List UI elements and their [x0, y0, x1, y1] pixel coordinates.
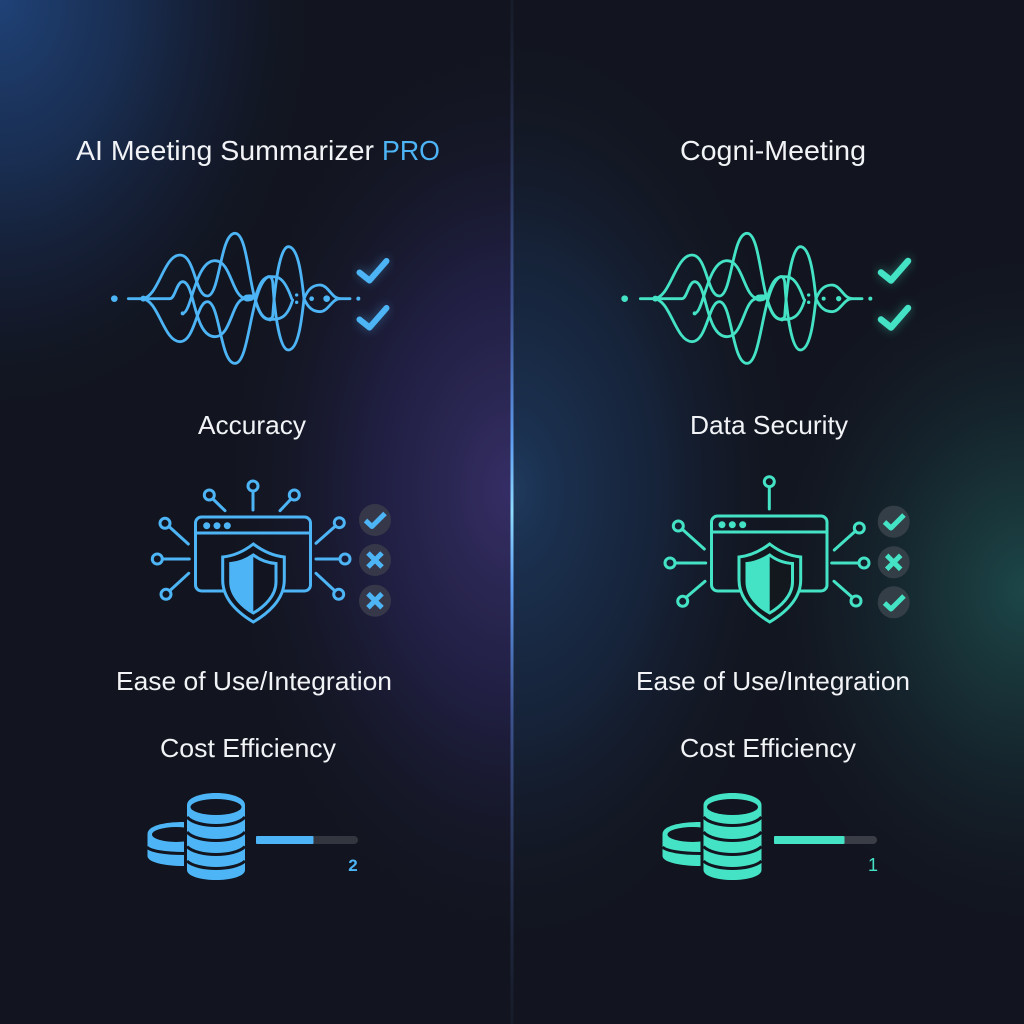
status: check, cross, cross — [359, 504, 391, 617]
icon: blue waveform — [111, 233, 360, 363]
icon: green check marks — [881, 261, 908, 328]
panel: AI Meeting Summarizer PRO — [76, 135, 440, 880]
label: Accuracy: Accuracy — [198, 410, 306, 440]
progress bar: score 1 — [774, 836, 877, 844]
icon: blue coin stacks — [147, 793, 245, 880]
label: Cost Efficiency: Cost Efficiency — [680, 733, 856, 763]
status: check, cross, check — [878, 506, 910, 618]
center divider line — [510, 0, 514, 1024]
value: 2: 2 — [348, 856, 358, 875]
heading: Cogni-Meeting: Cogni-Meeting — [680, 135, 866, 166]
value: 1: 1 — [868, 855, 878, 875]
label: Cost Efficiency: Cost Efficiency — [160, 733, 336, 763]
label: Ease of Use/Integration: Ease of Use/Integration — [116, 666, 392, 696]
panel: Cogni-Meeting — [621, 135, 910, 880]
heading: AI Meeting Summarizer PRO: AI Meeting Summarizer — [76, 135, 374, 166]
label: Ease of Use/Integration: Ease of Use/Integration — [636, 666, 910, 696]
heading: AI Meeting Summarizer PRO: PRO — [382, 135, 440, 166]
icon: blue check marks — [360, 261, 386, 328]
icon: green coin stacks — [662, 793, 762, 880]
icon: green waveform — [621, 233, 872, 363]
label: Data Security: Data Security — [690, 410, 848, 440]
progress bar: score 2 — [256, 836, 358, 844]
icon: blue browser window with shield — [152, 481, 350, 622]
icon: green browser window with shield — [665, 477, 869, 622]
